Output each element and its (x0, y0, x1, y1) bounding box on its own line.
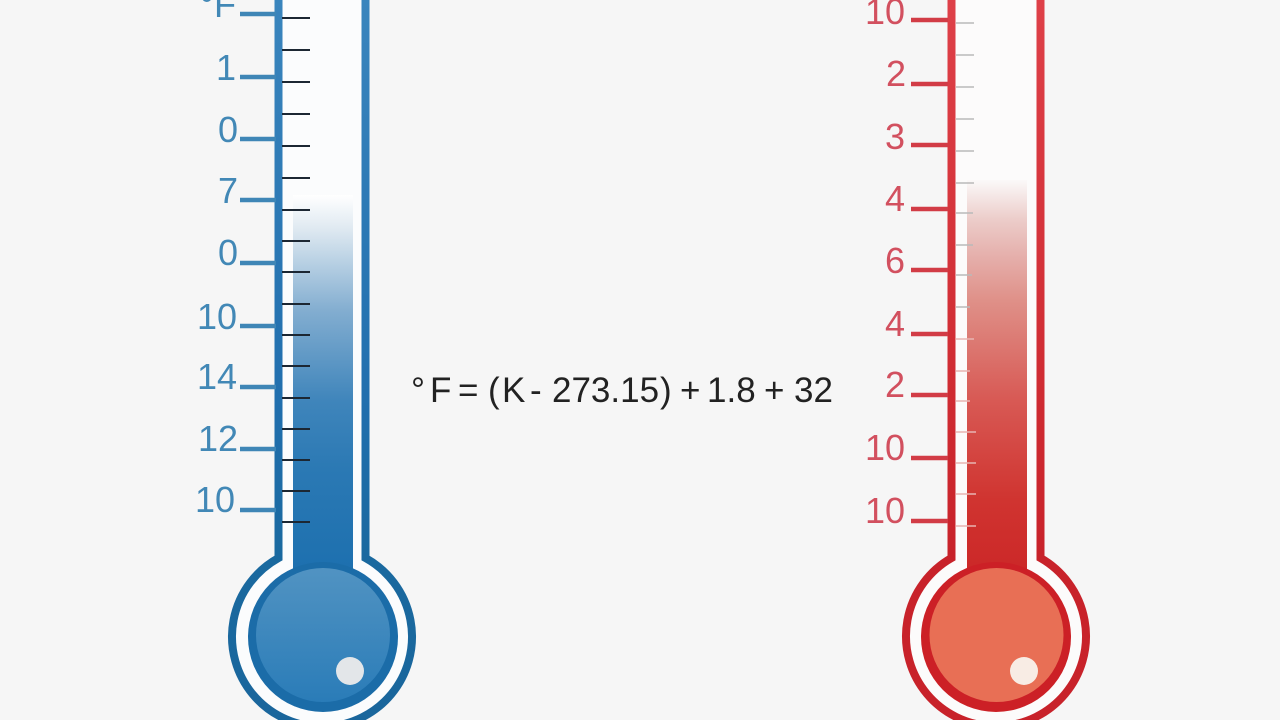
blue tube and bulb outline (232, 0, 412, 720)
blue scale labels: 14 (197, 356, 237, 397)
blue bulb (248, 562, 398, 712)
conversion formula: ( (488, 371, 500, 410)
conversion formula: K (502, 371, 525, 410)
conversion formula: 32 (794, 371, 833, 410)
red minor ticks (956, 23, 976, 526)
conversion formula: + (764, 371, 784, 410)
conversion formula: F (430, 371, 451, 410)
blue fluid column (293, 195, 353, 585)
red bulb (921, 562, 1071, 712)
blue scale labels: 1 (216, 47, 236, 88)
red bulb inner (930, 568, 1064, 702)
blue minor ticks (282, 18, 310, 522)
red scale labels: 10 (865, 427, 905, 468)
conversion formula: ) (660, 371, 672, 410)
conversion formula: - (530, 371, 542, 410)
blue major ticks (240, 14, 276, 510)
blue bulb inner (256, 568, 390, 702)
red thermometer (865, 0, 1086, 720)
conversion formula: + (680, 371, 700, 410)
blue scale labels: 0 (218, 232, 238, 273)
red scale labels: 2 (886, 53, 906, 94)
blue scale labels (195, 0, 238, 520)
conversion formula: 273.15 (552, 371, 659, 410)
conversion formula: 1.8 (707, 371, 756, 410)
red scale labels: 3 (885, 116, 905, 157)
conversion formula: = (458, 371, 478, 410)
red scale labels: 10 (865, 490, 905, 531)
red scale labels: 4 (885, 178, 905, 219)
red scale labels: 6 (885, 240, 905, 281)
blue scale labels: 7 (218, 170, 238, 211)
red fluid column (967, 180, 1027, 585)
blue scale labels: 10 (195, 479, 235, 520)
blue scale labels: 0 (218, 109, 238, 150)
red scale labels: 2 (885, 364, 905, 405)
red scale labels (865, 0, 906, 531)
blue scale labels: 10 (197, 296, 237, 337)
red major ticks (911, 20, 948, 521)
blue bulb highlight (336, 657, 364, 685)
conversion formula: ° (411, 371, 425, 410)
blue scale labels: 12 (198, 418, 238, 459)
blue thermometer (195, 0, 412, 720)
red scale labels: 4 (885, 303, 905, 344)
red bulb highlight (1010, 657, 1038, 685)
red tube and bulb outline (906, 0, 1086, 720)
